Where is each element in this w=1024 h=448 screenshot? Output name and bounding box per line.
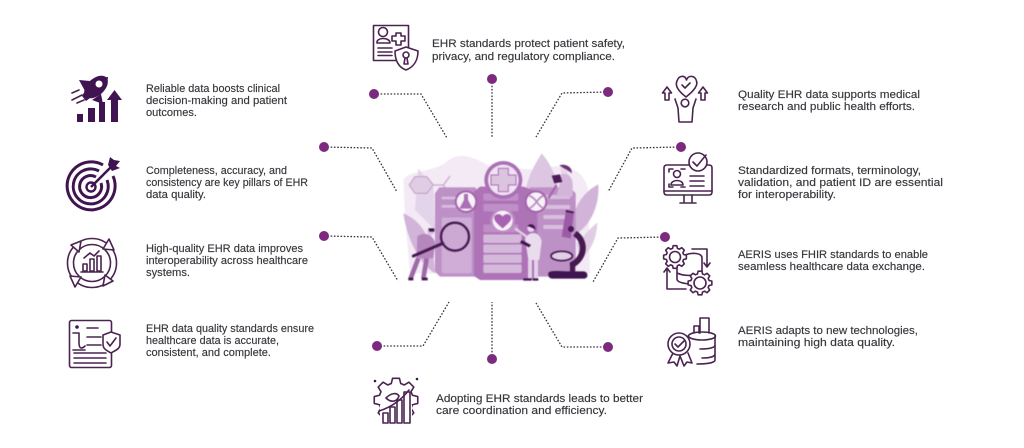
text: interoperability: interoperability across healthcare [146,255,308,267]
text: patient safety: privacy, and regulatory compliance. [432,51,615,63]
text: patient safety [432,38,625,63]
text: medical research: research and public health efforts. [738,101,915,113]
text: care coordination [436,393,643,417]
icon: databases with gears and arrows [664,246,712,295]
text: quality standards: EHR data quality standards ensure [146,323,314,335]
person with magnifier, left [408,228,435,280]
text: completeness: consistency are key pillars of EHR [146,177,308,189]
right record panel [530,187,576,277]
person with tablet, top right [548,165,573,198]
connector: top centre [487,74,497,138]
icon: document with person, plus and shield lock [374,26,418,70]
flask badge [455,190,477,213]
text: medical research [738,89,920,113]
text: reliable data: outcomes. [146,107,197,119]
text: quality standards: consistent, and complete. [146,347,271,359]
text: care coordination: care coordination and efficiency. [436,405,607,417]
icon: rocket and rising bar chart [72,71,122,122]
text: medical research: Quality EHR data supports medical [738,89,920,101]
text: interoperability: systems. [146,267,190,279]
connector: upper right [608,142,686,192]
text: standardized formats [738,165,943,201]
text: new technologies: AERIS adapts to new technologies, [738,325,918,337]
text: reliable data [146,83,287,119]
cross badge [484,161,522,199]
connector: bottom left [372,302,449,351]
connector: middle right [593,232,670,282]
text: patient safety: EHR standards protect patient safety, [432,38,625,50]
centre record panel [474,187,537,280]
text: FHIR standards: seamless healthcare data exchange. [738,261,925,273]
connector: upper left [319,142,397,192]
icon: gear with growth bars [374,378,418,425]
icon: cycle arrows around chart [68,238,116,288]
text: completeness: data quality. [146,189,206,201]
icon: target with arrow [67,157,120,210]
text: standardized formats: Standardized formats, terminology, [738,165,921,177]
text: interoperability [146,243,308,279]
magnifying glass [413,223,469,256]
text: quality standards [146,323,314,359]
DNA badge [525,190,547,213]
text: reliable data: decision-making and patient [146,95,287,107]
text: standardized formats: validation, and patient ID are essential [738,177,943,189]
text: reliable data: Reliable data boosts clinical [146,83,280,95]
icon: person raising arms with heart and arrows [662,76,708,122]
heart badge [490,208,515,233]
text: standardized formats: for interoperability. [738,189,836,201]
text: care coordination: Adopting EHR standards leads to better [436,393,643,405]
connector: top right [536,87,613,137]
left record panel [435,187,480,277]
connector: middle left [319,231,398,281]
connector: bottom right [536,303,613,352]
background blob [403,156,590,273]
text: interoperability: High-quality EHR data improves [146,243,303,255]
text: new technologies [738,325,918,349]
text: new technologies: maintaining high data quality. [738,337,895,349]
central illustration: medical records, researchers and microscope [403,153,598,281]
connector: bottom centre [487,302,497,364]
icon: information document with shield [70,320,120,368]
icon: award ribbon with database and bars [668,318,716,366]
molecule [409,176,450,193]
text: FHIR standards: AERIS uses FHIR standards to enable [738,249,928,261]
text: completeness [146,165,308,201]
icon: monitor with profile and check badge [664,153,712,203]
person with clipboard, centre [515,224,542,281]
leaves [403,153,598,273]
text: FHIR standards [738,249,928,273]
text: quality standards: healthcare data is accurate, [146,335,279,347]
microscope [548,210,587,279]
text: completeness: Completeness, accuracy, and [146,165,287,177]
connector: top left [369,89,447,138]
